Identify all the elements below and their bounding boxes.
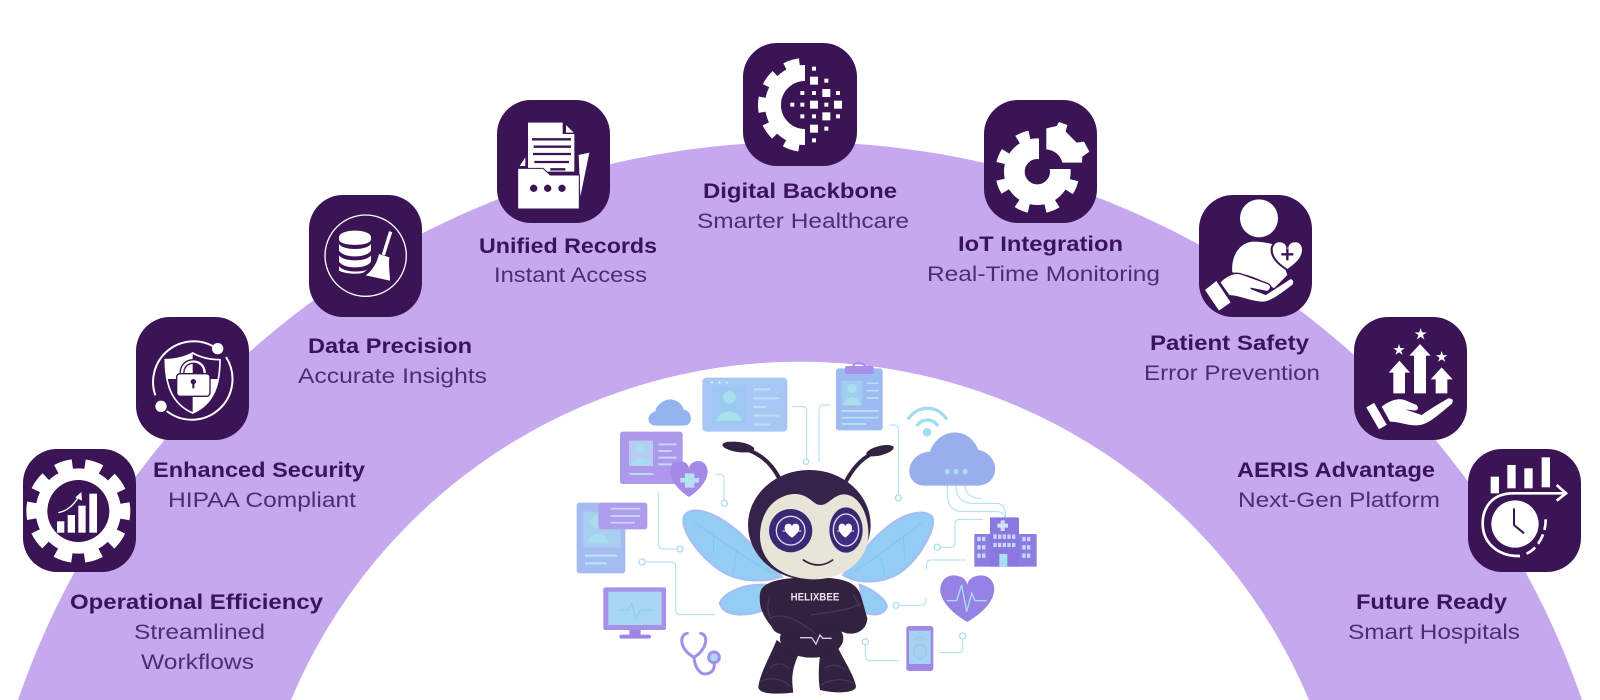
- icon: large cloud: [909, 433, 995, 486]
- icon: stethoscope: [682, 633, 719, 674]
- subtext: Error Prevention: [1144, 362, 1320, 385]
- icon: heart with pulse: [940, 575, 994, 622]
- icon box: half gear and data pixels: [743, 43, 857, 166]
- icon: small cloud: [648, 399, 691, 426]
- heading: Data Precision: [308, 335, 472, 358]
- heading: AERIS Advantage: [1237, 459, 1435, 482]
- heading: Digital Backbone: [703, 180, 897, 203]
- heading: Future Ready: [1356, 591, 1507, 614]
- heading: Operational Efficiency: [70, 591, 323, 614]
- icon box: folder with documents: [497, 100, 610, 223]
- subtext: Next-Gen Platform: [1238, 489, 1440, 512]
- card: Data Precision: [298, 195, 487, 388]
- icon: smartphone: [906, 626, 933, 671]
- card: IoT Integration: [927, 100, 1160, 286]
- antennae: [728, 446, 889, 480]
- heading: Enhanced Security: [153, 459, 365, 482]
- icon: clipboard card: [836, 363, 883, 430]
- icon box: database and broom: [309, 195, 422, 317]
- arch band: [18, 142, 1582, 700]
- card: Digital Backbone: [697, 43, 909, 233]
- mascot: HelixBee: [683, 440, 933, 694]
- eyes: [769, 507, 863, 553]
- connector lines: [639, 405, 1006, 661]
- torso and folded arms: [760, 577, 867, 635]
- icon box: patient in caring hand with heart: [1199, 195, 1312, 317]
- subtext line 2: Workflows: [141, 651, 254, 674]
- belly: [780, 619, 843, 658]
- icon: monitor with pulse: [603, 587, 666, 639]
- chest pulse line: [800, 635, 832, 644]
- heading: Patient Safety: [1150, 332, 1309, 355]
- smile: [803, 560, 833, 565]
- legs: [758, 640, 856, 694]
- card: Unified Records: [479, 100, 657, 287]
- card: AERIS Advantage: [1237, 317, 1467, 512]
- icon: ID card with heart: [620, 432, 708, 497]
- subtext: Smarter Healthcare: [697, 210, 909, 233]
- head: [748, 470, 871, 580]
- icon: wifi signal: [909, 408, 946, 435]
- wing veins: [693, 522, 923, 575]
- icon box: rising arrows, stars and hand: [1354, 317, 1467, 440]
- card: Future Ready: [1348, 449, 1581, 644]
- heading: IoT Integration: [958, 233, 1123, 256]
- icon box: bars, arrow and clock: [1468, 449, 1581, 572]
- subtext: Real-Time Monitoring: [927, 263, 1160, 286]
- subtext: Smart Hospitals: [1348, 621, 1520, 644]
- central illustration: HelixBee mascot with healthcare icons: [577, 363, 1037, 694]
- face: [760, 494, 868, 579]
- heading: Unified Records: [479, 235, 657, 258]
- subtext: Instant Access: [494, 264, 647, 287]
- icon box: gear with growth chart: [23, 449, 136, 572]
- subtext: Accurate Insights: [298, 365, 487, 388]
- wings: [683, 511, 933, 614]
- subtext: HIPAA Compliant: [168, 489, 356, 512]
- subtext: Streamlined: [134, 621, 265, 644]
- icon box: interlocking gears: [984, 100, 1097, 223]
- label: HELIXBEE: HELIXBEE: [791, 591, 840, 603]
- icon: profile window card: [702, 378, 787, 432]
- card: Patient Safety: [1144, 195, 1320, 385]
- icon box: shield and lock: [136, 317, 249, 440]
- icon: patient document with message: [577, 503, 647, 573]
- body segment lines: [760, 595, 862, 687]
- icon: hospital building: [974, 517, 1037, 567]
- card: Enhanced Security: [136, 317, 365, 512]
- card: Operational Efficiency: [23, 449, 323, 674]
